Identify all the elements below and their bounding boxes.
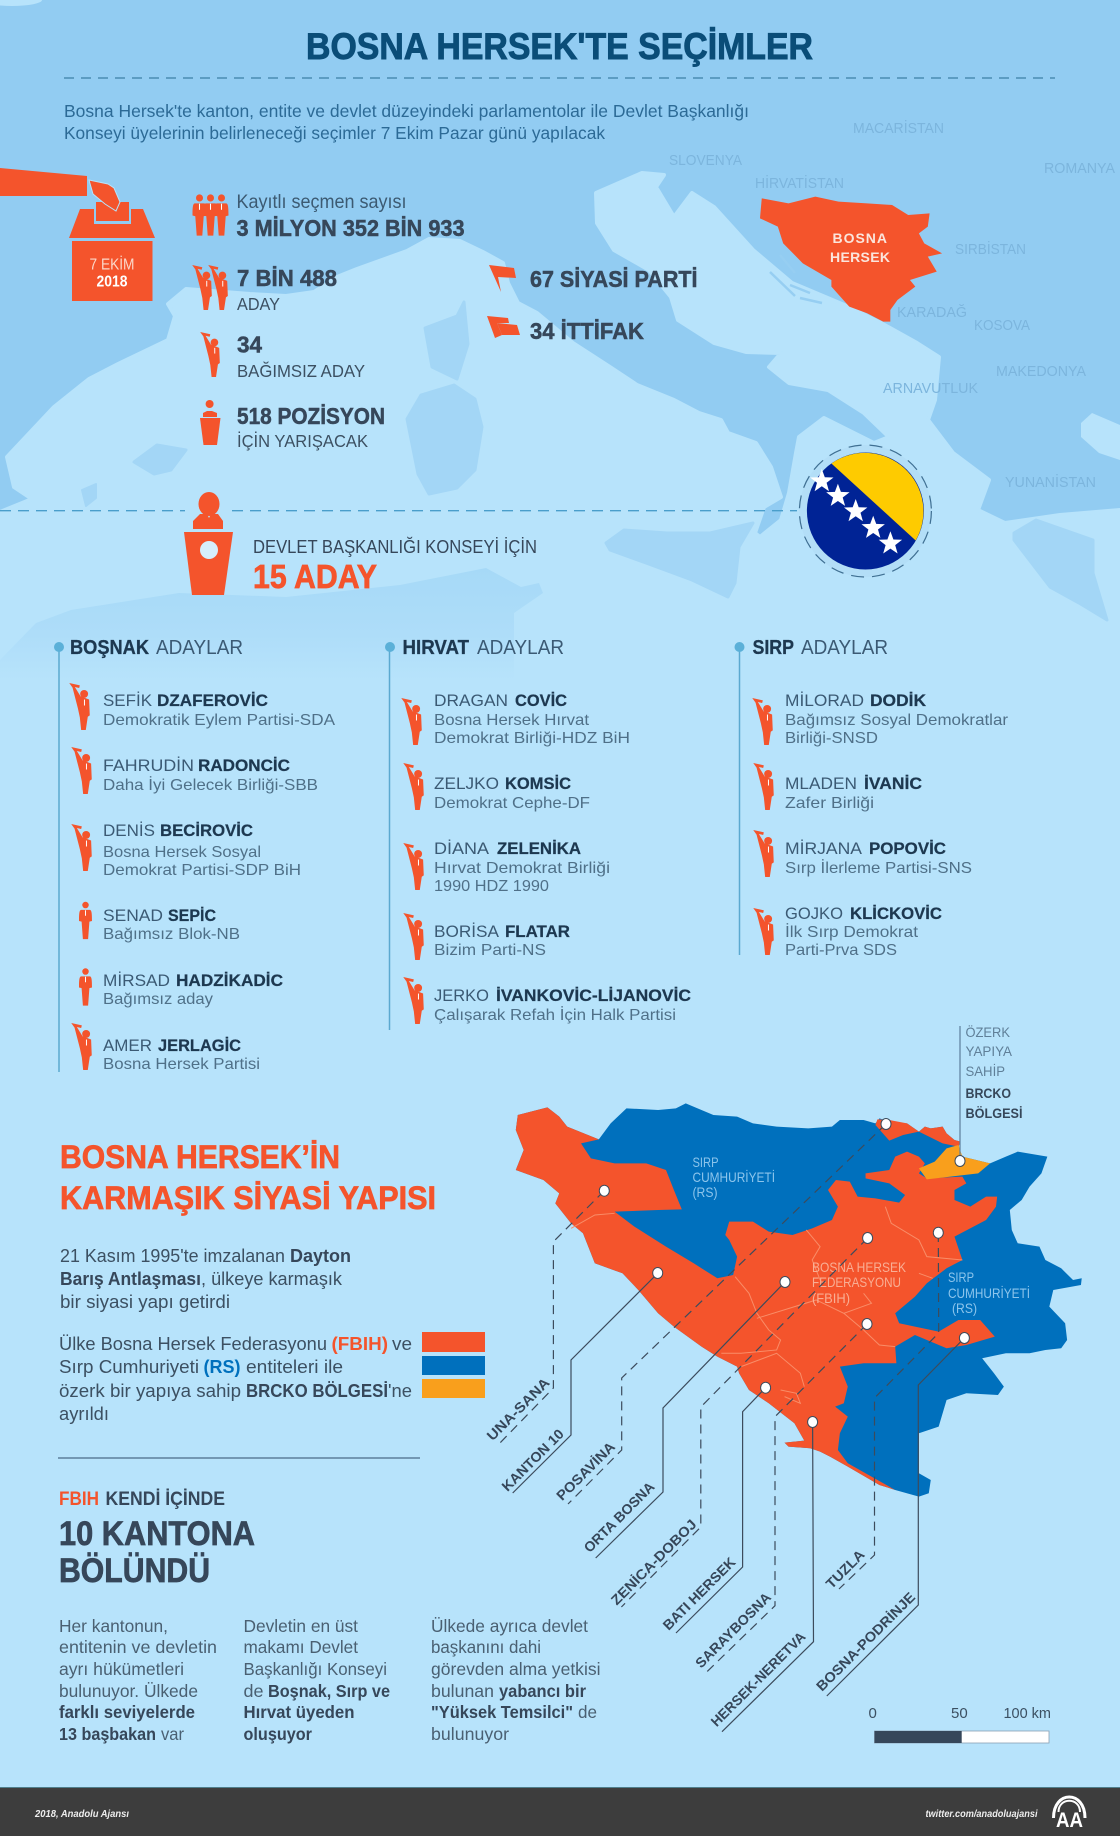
map label: Federation: FEDERASYONU: [812, 1274, 901, 1290]
text block: entities legend text: [59, 1334, 412, 1424]
candidate: Milorad Dodik: [752, 691, 1009, 747]
map country labels: SLOVENYA: [669, 152, 742, 169]
intro text: Bosna Hersek'te kanton, entite ve devlet düzeyindeki parlamentolar ile Devlet Başkanlığı: [64, 101, 749, 121]
candidate: Denis Becirovic: BECİROVİC: [160, 821, 253, 840]
text block: entities legend text: Sırp Cumhuriyeti: [59, 1357, 199, 1377]
text column: governments: var: [161, 1724, 184, 1744]
text column: high representative: bulunuyor: [431, 1724, 509, 1744]
candidate: Sefik Dzaferovic: [69, 683, 335, 730]
panel: Serb candidates: [734, 637, 1009, 959]
candidate: Mirjana Popovic: MİRJANA: [785, 839, 863, 858]
text column: high representative: "Yüksek Temsilci": [431, 1702, 573, 1722]
mini map: Bosna Hersek: BOSNA: [832, 230, 887, 246]
candidate: Borisa Flatar: Bizim Parti-NS: [434, 942, 546, 959]
canton labels: [483, 1374, 918, 1730]
candidate: Senad Sepic: [79, 902, 240, 943]
heading: 10 cantons: BÖLÜNDÜ: [59, 1552, 210, 1590]
callout: Brcko district: BÖLGESİ: [966, 1105, 1022, 1121]
text block: Dayton agreement: Dayton: [290, 1246, 351, 1266]
text column: high representative: [431, 1616, 600, 1744]
text column: governments: [59, 1616, 217, 1744]
candidate: Fahrudin Radoncic: RADONCİC: [198, 756, 290, 775]
candidate: Milorad Dodik: Bağımsız Sosyal Demokratlar: [785, 712, 1009, 729]
candidate: Sefik Dzaferovic: DZAFEROVİC: [157, 691, 268, 710]
candidate: Mladen Ivanic: MLADEN: [785, 774, 857, 793]
candidate: Jerko Ivankovic-Lijanovic: JERKO: [434, 986, 489, 1005]
map country labels: SIRBİSTAN: [955, 240, 1026, 258]
candidate: Denis Becirovic: DENİS: [103, 821, 155, 840]
map country labels: ARNAVUTLUK: [883, 380, 978, 397]
candidate: Milorad Dodik: MİLORAD: [785, 691, 864, 710]
text column: presidency: Devletin en üst: [244, 1616, 358, 1636]
map country labels: [669, 119, 1115, 491]
text column: presidency: Başkanlığı Konseyi: [244, 1659, 387, 1679]
text block: entities legend text: ayrıldı: [59, 1404, 109, 1424]
stat: independent candidates: BAĞIMSIZ ADAY: [237, 360, 365, 381]
candidate: Gojko Klickovic: Parti-Prva SDS: [785, 942, 897, 959]
presidency council candidates: 15 ADAY: [253, 558, 377, 595]
map country labels: ROMANYA: [1044, 160, 1115, 177]
text column: presidency: [244, 1616, 390, 1744]
stat: registered voters: [192, 191, 464, 241]
candidate: Diana Zelenika: DİANA: [434, 839, 490, 858]
candidate: Mirsad Hadzikadic: Bağımsız aday: [103, 991, 213, 1008]
heading: Bosniak: [70, 637, 243, 659]
text block: Dayton agreement: [60, 1246, 351, 1312]
candidate: Diana Zelenika: 1990 HDZ 1990: [434, 878, 549, 895]
text block: entities legend text: (RS): [204, 1357, 240, 1377]
map: Bosnia and Herzegovina political structure: [516, 1103, 1082, 1497]
heading: Croat: ADAYLAR: [477, 637, 564, 659]
candidate: Jerko Ivankovic-Lijanovic: İVANKOVİC-LİJANOVİC: [496, 986, 691, 1005]
candidate: Jerko Ivankovic-Lijanovic: Çalışarak Refah İçin Halk Partisi: [434, 1005, 676, 1024]
presidency council candidates: DEVLET BAŞKANLIĞI KONSEYİ İÇİN: [253, 536, 537, 557]
canton leader lines: [497, 1124, 964, 1732]
intro text: [64, 101, 749, 143]
candidate: Mladen Ivanic: Zafer Birliği: [785, 795, 874, 812]
heading: complex political structure: BOSNA HERSEK’İN: [60, 1139, 340, 1175]
legend swatches: [422, 1332, 485, 1398]
panel: Croat candidates: [385, 637, 691, 1030]
canton labels: SARAYBOSNA: [692, 1589, 774, 1671]
candidate: Dragan Covic: DRAGAN: [434, 691, 508, 710]
text block: Dayton agreement: bir siyasi yapı getirdi: [60, 1292, 230, 1312]
callout: Brcko district: SAHİP: [966, 1062, 1005, 1079]
candidate: Gojko Klickovic: KLİCKOVİC: [850, 904, 942, 923]
scale bar: [868, 1705, 1051, 1743]
scale bar: 0: [868, 1705, 877, 1722]
stat: positions: 518 POZİSYON: [237, 403, 385, 429]
text block: Dayton agreement: 21 Kasım 1995'te imzalanan: [60, 1246, 285, 1266]
text column: governments: 13 başbakan: [59, 1724, 156, 1744]
callout: Brcko district: ÖZERK: [966, 1023, 1011, 1040]
text column: presidency: makamı Devlet: [244, 1637, 358, 1657]
candidate: Gojko Klickovic: İlk Sırp Demokrat: [785, 922, 919, 941]
map label: Republika Srpska east: (RS): [952, 1300, 977, 1316]
canton boundaries: [571, 1207, 962, 1403]
text block: entities legend text: BRCKO BÖLGESİ: [246, 1381, 388, 1401]
candidate: Zeljko Komsic: ZELJKO: [434, 774, 499, 793]
text column: presidency: Boşnak, Sırp ve: [268, 1681, 390, 1701]
text column: high representative: Ülkede ayrıca devlet: [431, 1616, 588, 1636]
callout: Brcko district: YAPIYA: [966, 1043, 1013, 1059]
candidate: Mirsad Hadzikadic: [79, 968, 283, 1008]
candidate: Mirsad Hadzikadic: MİRSAD: [103, 971, 170, 990]
callout: Brcko district: BRCKO: [966, 1085, 1011, 1101]
candidate: Diana Zelenika: [403, 839, 610, 895]
stat: independent candidates: [200, 332, 365, 381]
candidate: Senad Sepic: SENAD: [103, 906, 163, 925]
text column: governments: farklı seviyelerde: [59, 1702, 195, 1722]
canton labels: KANTON 10: [498, 1426, 567, 1494]
text column: presidency: Hırvat üyeden: [244, 1702, 354, 1722]
candidate: Sefik Dzaferovic: SEFİK: [103, 691, 153, 710]
mini map: Bosna Hersek: HERSEK: [830, 249, 890, 265]
map label: Republika Srpska west: [692, 1154, 775, 1200]
candidate: Amer Jerlagic: JERLAGİC: [158, 1036, 241, 1055]
canton labels: ZENİCA-DOBOJ: [608, 1516, 699, 1608]
candidate: Mirjana Popovic: POPOVİC: [869, 839, 946, 858]
mini map: Bosna Hersek: [760, 197, 942, 322]
map country labels: MACARİSTAN: [853, 119, 944, 137]
text column: presidency: de: [244, 1681, 264, 1701]
footer twitter: twitter.com/anadoluajansi: [926, 1808, 1038, 1820]
candidate: Gojko Klickovic: [753, 904, 942, 959]
candidate: Sefik Dzaferovic: Demokratik Eylem Partisi-SDA: [103, 712, 335, 729]
stat: positions: İÇİN YARIŞACAK: [237, 431, 368, 451]
candidate: Denis Becirovic: Bosna Hersek Sosyal: [103, 844, 261, 861]
candidate: Mladen Ivanic: [753, 763, 922, 812]
candidate: Diana Zelenika: Hırvat Demokrat Birliği: [434, 860, 610, 877]
candidate: Denis Becirovic: [71, 821, 301, 879]
heading: Bosniak: ADAYLAR: [156, 637, 243, 659]
footer bar: [0, 1787, 1120, 1836]
candidate: Mirjana Popovic: [753, 830, 972, 877]
canton labels: HERSEK-NERETVA: [707, 1628, 809, 1730]
map label: Republika Srpska west: CUMHURİYETİ: [692, 1168, 775, 1185]
candidate: Dragan Covic: Bosna Hersek Hırvat: [434, 712, 590, 729]
heading: Croat: [402, 637, 564, 659]
candidate: Dragan Covic: COVİC: [515, 691, 567, 710]
candidate: Amer Jerlagic: Bosna Hersek Partisi: [103, 1056, 260, 1073]
candidate: Dragan Covic: Demokrat Birliği-HDZ BiH: [434, 730, 630, 747]
canton labels: BATI HERSEK: [659, 1554, 739, 1633]
candidate: Diana Zelenika: ZELENİKA: [497, 839, 581, 858]
candidate: Zeljko Komsic: [403, 763, 590, 812]
stat: positions: [200, 400, 385, 451]
stat: candidates: [192, 265, 337, 314]
candidate: Gojko Klickovic: GOJKO: [785, 904, 843, 923]
text block: Dayton agreement: Barış Antlaşması: [60, 1269, 201, 1289]
heading: Serb: ADAYLAR: [801, 637, 888, 659]
stat: registered voters: 3 MİLYON 352 BİN 933: [236, 215, 464, 241]
map label: Republika Srpska west: SIRP: [692, 1154, 718, 1170]
icon: Anadolu Agency logo: AA: [1056, 1809, 1083, 1832]
panel: Bosniak candidates: [54, 637, 335, 1073]
stat: candidates: ADAY: [237, 294, 280, 314]
text block: entities legend text: 'ne: [388, 1381, 412, 1401]
canton labels: TUZLA: [822, 1546, 868, 1592]
text column: governments: entitenin ve devletin: [59, 1637, 217, 1657]
heading: Serb: SIRP: [752, 637, 794, 659]
map pins: [599, 1118, 969, 1428]
heading: complex political structure: KARMAŞIK SİYASİ YAPISI: [60, 1180, 436, 1216]
candidate: Borisa Flatar: BORİSA: [434, 922, 500, 941]
candidate: Mirjana Popovic: Sırp İlerleme Partisi-SNS: [785, 858, 972, 877]
map label: Republika Srpska east: SIRP: [948, 1269, 974, 1285]
heading: complex political structure: [60, 1139, 436, 1216]
candidate: Fahrudin Radoncic: FAHRUDİN: [103, 756, 194, 775]
text column: presidency: oluşuyor: [244, 1724, 312, 1744]
candidate: Dragan Covic: [401, 691, 630, 747]
candidate: Fahrudin Radoncic: [71, 747, 318, 794]
intro text: Konseyi üyelerinin belirleneceği seçimler 7 Ekim Pazar günü yapılacak: [64, 123, 605, 143]
map country labels: YUNANİSTAN: [1005, 473, 1096, 491]
presidency council candidates: [253, 536, 537, 595]
icon: Bosnian flag: [799, 445, 931, 577]
map label: Federation: [812, 1259, 907, 1306]
text block: entities legend text: özerk bir yapıya sahip: [59, 1381, 241, 1401]
map country labels: HİRVATİSTAN: [755, 174, 844, 192]
stat: political parties: 67 SİYASİ PARTİ: [530, 266, 698, 292]
map label: Federation: BOSNA HERSEK: [812, 1259, 907, 1275]
canton labels: POSAVİNA: [553, 1438, 618, 1504]
stat: candidates: 7 BİN 488: [237, 265, 337, 291]
text column: governments: ayrı hükümetleri: [59, 1659, 184, 1679]
candidate: Milorad Dodik: Birliği-SNSD: [785, 730, 878, 747]
icon: ballot box with hand: [0, 168, 155, 301]
date on ballot box: 7 EKİM: [90, 254, 134, 274]
heading: 10 cantons: FBIH: [59, 1488, 99, 1510]
text column: high representative: de: [578, 1702, 597, 1722]
map country labels: KARADAĞ: [897, 304, 967, 321]
candidate: Fahrudin Radoncic: Daha İyi Gelecek Birliği-SBB: [103, 775, 318, 794]
map label: Republika Srpska east: CUMHURİYETİ: [948, 1284, 1030, 1301]
stat: alliances: 34 İTTİFAK: [530, 318, 644, 344]
candidate: Amer Jerlagic: [71, 1023, 260, 1073]
text column: high representative: yabancı bir: [499, 1681, 586, 1701]
heading: 10 cantons: 10 KANTONA: [59, 1515, 255, 1553]
canton labels: UNA-SANA: [483, 1374, 553, 1444]
callout: Brcko district: [960, 1023, 1022, 1161]
heading: 10 cantons: KENDİ İÇİNDE: [106, 1487, 225, 1510]
heading: 10 cantons: [59, 1487, 255, 1590]
entity: Brcko district: [919, 1145, 990, 1179]
stat: registered voters: Kayıtlı seçmen sayısı: [236, 191, 406, 213]
title: BOSNA HERSEK'TE SEÇİMLER: [306, 26, 813, 67]
text block: entities legend text: (FBIH): [332, 1334, 388, 1354]
stat: alliances: [487, 316, 644, 347]
text column: high representative: başkanını dahi: [431, 1637, 541, 1657]
text column: high representative: görevden alma yetkisi: [431, 1659, 600, 1679]
heading: Croat: HIRVAT: [402, 637, 469, 659]
text column: governments: Her kantonun,: [59, 1616, 168, 1636]
candidate: Senad Sepic: Bağımsız Blok-NB: [103, 926, 240, 943]
candidate: Zeljko Komsic: Demokrat Cephe-DF: [434, 795, 590, 812]
text block: entities legend text: ve: [392, 1334, 412, 1354]
icon: presidential podium: [184, 492, 233, 595]
text column: governments: bulunuyor. Ülkede: [59, 1681, 198, 1701]
candidate: Jerko Ivankovic-Lijanovic: [403, 977, 691, 1024]
scale bar: 100 km: [1004, 1705, 1051, 1722]
text column: high representative: bulunan: [431, 1681, 494, 1701]
canton labels: ORTA BOSNA: [580, 1478, 658, 1556]
candidate: Denis Becirovic: Demokrat Partisi-SDP BiH: [103, 862, 301, 879]
map label: Republika Srpska east: [948, 1269, 1030, 1316]
icon: Anadolu Agency logo: [1054, 1797, 1085, 1832]
candidate: Borisa Flatar: FLATAR: [505, 922, 570, 941]
canton labels: BOSNA-PODRİNJE: [813, 1589, 918, 1694]
text block: Dayton agreement: , ülkeye karmaşık: [201, 1269, 343, 1289]
candidate: Borisa Flatar: [403, 913, 570, 960]
candidate: Mirsad Hadzikadic: HADZİKADİC: [176, 971, 283, 990]
entity: Federation of Bosnia and Herzegovina: [516, 1107, 997, 1490]
heading: Bosniak: BOŞNAK: [70, 637, 150, 659]
map country labels: MAKEDONYA: [996, 363, 1086, 380]
text block: entities legend text: Ülke Bosna Hersek Federasyonu: [59, 1334, 327, 1354]
entity: Republika Srpska: [516, 1103, 1082, 1497]
stat: independent candidates: 34: [237, 332, 262, 358]
heading: Serb: [752, 637, 888, 659]
scale bar: 50: [951, 1705, 968, 1722]
map country labels: KOSOVA: [974, 317, 1030, 334]
date on ballot box: [90, 254, 134, 290]
candidate: Milorad Dodik: DODİK: [870, 691, 927, 710]
footer credit: 2018, Anadolu Ajansı: [34, 1808, 129, 1820]
candidate: Amer Jerlagic: AMER: [103, 1036, 152, 1055]
map label: Federation: (FBIH): [812, 1290, 850, 1306]
candidate: Mladen Ivanic: İVANİC: [864, 774, 922, 793]
candidate: Zeljko Komsic: KOMSİC: [505, 774, 571, 793]
candidate: Senad Sepic: SEPİC: [168, 906, 216, 925]
date on ballot box: 2018: [96, 274, 128, 290]
text block: entities legend text: entiteleri ile: [246, 1357, 343, 1377]
map label: Republika Srpska west: (RS): [692, 1184, 718, 1200]
